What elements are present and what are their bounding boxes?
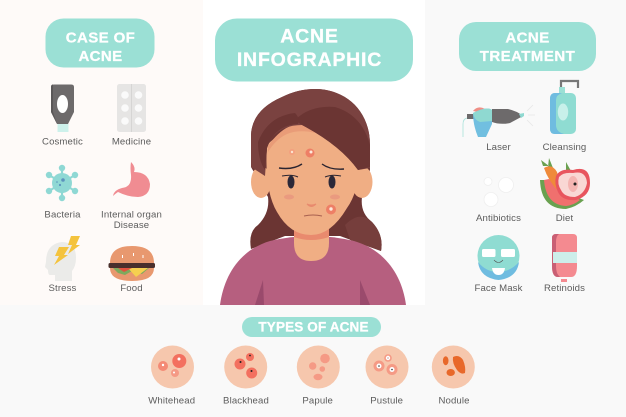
- hair front: [251, 89, 370, 176]
- label: diet: Diet: [556, 213, 573, 224]
- face: [266, 126, 358, 235]
- ears: [251, 166, 372, 198]
- label: pustule: Pustule: [370, 396, 403, 406]
- icon: stomach: [113, 162, 150, 197]
- hair back: [250, 89, 382, 251]
- nodule: [432, 346, 475, 388]
- eyebrows: [279, 164, 344, 169]
- heading: acne treatment: TREATMENT: [480, 48, 575, 65]
- panel: title and portrait: [215, 18, 413, 305]
- eyes: [282, 175, 341, 188]
- panel: case of acne: [42, 18, 162, 294]
- neck shadow: [294, 225, 329, 240]
- illustration: woman with acne: [220, 89, 406, 305]
- shirt: [220, 236, 406, 305]
- icon: medicine: [117, 84, 146, 132]
- label: cleansing: Cleansing: [543, 142, 586, 153]
- label: cosmetic: Cosmetic: [42, 136, 83, 148]
- label: retinoids: Retinoids: [544, 283, 585, 294]
- heading: case of acne: ACNE: [78, 48, 123, 65]
- panel: acne treatment: [459, 22, 596, 294]
- blackhead: [224, 346, 267, 388]
- label: laser: Laser: [486, 142, 511, 153]
- icon: bacteria: [46, 165, 78, 201]
- icon: retinoids: [552, 234, 577, 282]
- label: stress: Stress: [49, 283, 77, 294]
- hair shade: [258, 107, 370, 170]
- title: ACNE: [280, 26, 339, 48]
- label: antibiotics: Antibiotics: [476, 213, 521, 224]
- cheeks: [284, 194, 340, 200]
- heading: acne treatment: ACNE: [505, 29, 550, 46]
- panel: types of acne: [148, 317, 475, 406]
- label: internal organ disease: Disease: [114, 220, 149, 231]
- forehead shadow: [268, 124, 330, 152]
- label: internal organ disease: Internal organ: [101, 210, 162, 220]
- label: whitehead: Whitehead: [148, 396, 195, 406]
- papule: [297, 346, 340, 388]
- title: [215, 18, 413, 82]
- label: blackhead: Blackhead: [223, 396, 269, 406]
- label: internal organ disease: [101, 210, 162, 231]
- heading: case of acne: [46, 18, 154, 68]
- heading: types of acne: [242, 317, 381, 337]
- nose and mouth: [304, 204, 322, 216]
- icon: diet: [540, 158, 590, 209]
- pustule: [366, 346, 408, 388]
- icon: antibiotics: [484, 178, 514, 206]
- label: nodule: Nodule: [438, 396, 470, 406]
- hair lock highlight: [345, 217, 382, 251]
- icon: cosmetic: [51, 84, 74, 132]
- label: papule: Papule: [302, 396, 333, 406]
- title: INFOGRAPHIC: [237, 49, 382, 71]
- whitehead: [151, 346, 194, 388]
- heading: types of acne: TYPES OF ACNE: [258, 320, 369, 335]
- heading: acne treatment: [459, 22, 596, 71]
- pimples: [289, 148, 336, 214]
- label: food: Food: [120, 283, 143, 294]
- icon: cleansing: [550, 81, 578, 134]
- label: bacteria: Bacteria: [44, 210, 81, 220]
- neck: [294, 225, 329, 261]
- label: medicine: Medicine: [112, 136, 151, 148]
- label: face mask: Face Mask: [474, 283, 523, 294]
- icon: food burger: [108, 246, 155, 281]
- icon: laser: [463, 105, 535, 137]
- heading: case of acne: CASE OF: [66, 29, 135, 46]
- icon: stress: [45, 236, 80, 281]
- icon: face mask: [478, 235, 520, 280]
